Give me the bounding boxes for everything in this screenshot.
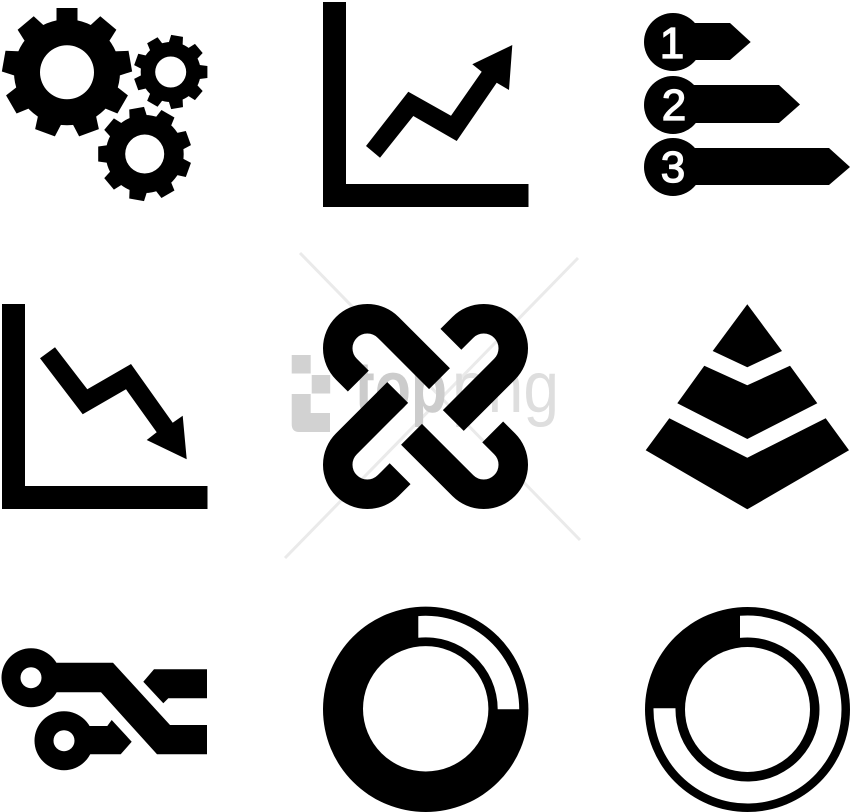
icon: layered pyramid: [646, 304, 849, 509]
icon: numbered list: [644, 13, 850, 196]
watermark: top: [355, 348, 447, 428]
list item 2: [644, 76, 800, 134]
watermark: png: [452, 348, 559, 428]
icon: interlocking chain knot: [338, 319, 513, 494]
list item 1: [644, 13, 751, 71]
icon: falling line chart: [2, 304, 208, 509]
icon: donut chart quarter highlight: [323, 607, 528, 812]
gear: small right: [134, 35, 207, 109]
list item 3: [644, 138, 850, 196]
icon: circuit connector: [2, 648, 207, 770]
watermark: [285, 253, 580, 558]
gear: large: [1, 8, 133, 137]
gear: medium bottom: [98, 107, 192, 201]
icon: gears: [1, 8, 207, 201]
list item 3: 3: [661, 143, 685, 192]
list item 2: 2: [662, 81, 686, 130]
icon: donut chart three-quarter highlight: [645, 607, 850, 812]
icon: rising line chart: [323, 2, 528, 207]
list item 1: 1: [660, 19, 684, 68]
